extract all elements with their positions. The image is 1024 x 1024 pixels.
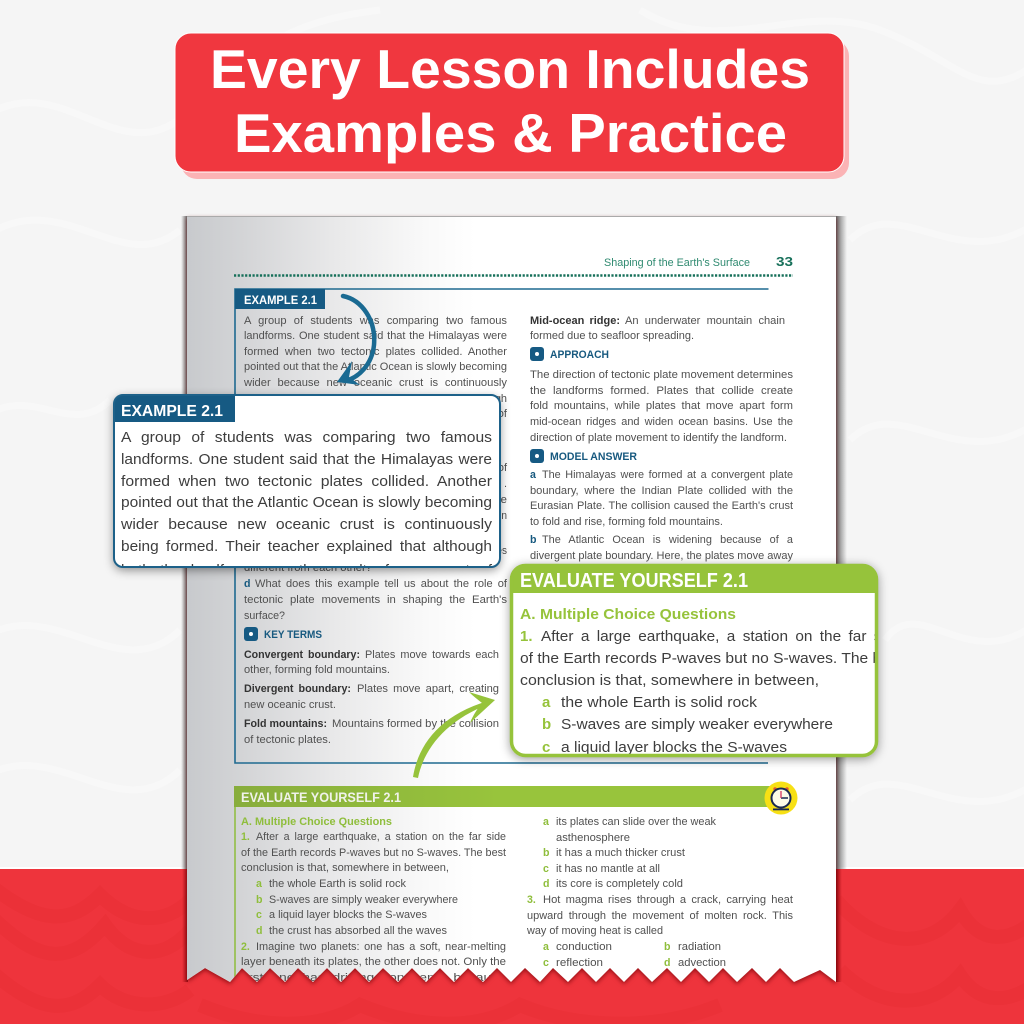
callout question text: of the Earth records P-waves but no S-waves. The best (520, 650, 903, 667)
callout body text: formed when two tectonic plates collided. Another (121, 473, 492, 490)
callout heading bar (510, 564, 878, 593)
practice questions right column: radiation (678, 941, 721, 953)
example text left column: b Why is the Atlantic Ocean growing wider at the (244, 494, 507, 506)
callout heading tab: EXAMPLE 2.1 (121, 403, 223, 420)
example text left column: What does this example tell us about the role of (255, 578, 507, 590)
example text right column: formed due to seafloor spreading. (530, 330, 694, 342)
practice questions right column: conduction (556, 941, 612, 953)
practice questions left column: layer beneath its plates, the other does not. Only the (241, 956, 506, 968)
example text left column: formed when two tectonic plates collided. Another (244, 346, 507, 358)
practice questions right column: d (543, 878, 549, 890)
practice questions right column: b (664, 941, 671, 953)
example text right column: Eurasian Plate. The collision caused the Earth's crust (530, 500, 793, 512)
practice questions left column: conclusion is that, somewhere in between, (241, 862, 449, 874)
example text right column: fold mountains, while plates that move apart form (530, 400, 793, 412)
callout question text: 1. (520, 628, 533, 645)
example text left column: surface? (244, 610, 285, 622)
example text right column: a (530, 469, 536, 481)
callout question text: A. Multiple Choice Questions (520, 606, 736, 623)
example text right column: Mid-ocean ridge: (530, 315, 620, 327)
example text left column: a What type of plate boundary formed the range of (244, 462, 507, 474)
example text left column: A group of students was comparing two famous (244, 315, 507, 327)
title banner: Every Lesson Includes (210, 38, 810, 100)
practice questions left column: S-waves are simply weaker everywhere (269, 894, 458, 906)
practice questions left column: the whole Earth is solid rock (269, 878, 407, 890)
running header: Shaping of the Earth's Surface (604, 257, 750, 269)
practice questions left column: 2. (241, 941, 250, 953)
running header: 33 (776, 254, 793, 269)
key terms: Divergent boundary: (244, 683, 351, 695)
icon: key terms bullet (244, 627, 258, 641)
callout: example 2.1 zoom (114, 395, 500, 579)
example text left column (243, 315, 508, 622)
callout question text: the whole Earth is solid rock (561, 694, 758, 711)
example text right column: The Atlantic Ocean is widening because of a (542, 534, 793, 546)
practice questions right column: it has a much thicker crust (556, 847, 685, 859)
example text right column: The Himalayas were formed at a convergent plate (542, 469, 793, 481)
key terms: Mountains formed by the collision (332, 718, 499, 730)
callout question text: conclusion is that, somewhere in between, (520, 672, 819, 689)
example text left column: pointed out that the Atlantic Ocean is slowly becoming (244, 361, 507, 373)
practice questions left column: the crust has absorbed all the waves (269, 925, 447, 937)
practice questions left column: A. Multiple Choice Questions (241, 816, 392, 828)
callout question text: After a large earthquake, a station on the far side (541, 628, 902, 645)
callout body text: both the landforms are the result of movement of (121, 562, 493, 579)
example text right column: The direction of tectonic plate movement determines (530, 369, 793, 381)
callout question text: S-waves are simply weaker everywhere (561, 716, 833, 733)
title banner (175, 33, 849, 179)
practice questions left column: b (256, 894, 263, 906)
textbook page (187, 216, 836, 990)
callout body text: landforms. One student said that the Himalayas were (121, 451, 492, 468)
practice questions right column: a (543, 941, 549, 953)
callout question text: a liquid layer blocks the S-waves (561, 739, 787, 756)
callout: evaluate yourself zoom (510, 564, 903, 757)
key terms: Plates move towards each (365, 649, 499, 661)
example text right column: APPROACH (550, 349, 609, 361)
key terms: new oceanic crust. (244, 699, 336, 711)
practice questions right column: reflection (556, 957, 603, 969)
icon: alarm clock (764, 782, 798, 814)
icon: approach bullet (530, 347, 544, 361)
example text left column: c How do the plates move at each type of boundary in (244, 510, 507, 522)
practice questions right column: c (543, 957, 549, 969)
example text left column: landforms. One student said that the Himalayas were (244, 330, 507, 342)
page edge shadows (181, 216, 847, 982)
callout body text: being formed. Their teacher explained that although (121, 538, 492, 555)
key terms: other, forming fold mountains. (244, 664, 390, 676)
callout body text (121, 431, 492, 566)
callout body text: wider because new oceanic crust is continuously (120, 516, 493, 533)
practice questions right column: way of moving heat is called (526, 925, 663, 937)
practice questions right column: advection (678, 957, 726, 969)
example text right column: direction of plate movement to identify the landform. (530, 432, 787, 444)
practice questions right column: upward through the movement of molten rock. This (527, 910, 793, 922)
example text left column: and how do the results of plate motion make these plates (244, 545, 507, 557)
key terms: Fold mountains: (244, 718, 327, 730)
icon: model answer bullet (530, 449, 544, 463)
practice questions left column: c (256, 909, 262, 921)
practice questions left column: Imagine two planets: one has a soft, near-melting (256, 941, 506, 953)
callout question text: c (542, 739, 550, 756)
arrow: blue from page example to callout (337, 296, 374, 385)
practice questions right column: it has no mantle at all (556, 863, 660, 875)
callout body text: pointed out that the Atlantic Ocean is slowly becoming (121, 494, 492, 511)
key terms (244, 627, 499, 746)
callout heading bar: EVALUATE YOURSELF 2.1 (520, 570, 748, 592)
practice questions right column: asthenosphere (556, 832, 630, 844)
callout heading tab (114, 395, 235, 422)
practice questions right column: a (543, 816, 549, 828)
example text right column: MODEL ANSWER (550, 451, 637, 463)
example text right column: mid-ocean ridges and widen ocean basins. Use the (530, 416, 793, 428)
practice questions right column: d (664, 957, 670, 969)
example text right column: to fold and rise, forming fold mountains. (530, 516, 723, 528)
callout question text: b (542, 716, 551, 733)
practice questions left column (241, 816, 506, 984)
practice questions left column: d (256, 925, 262, 937)
example text right column: boundary, where the Indian Plate collided with the (530, 485, 793, 497)
practice questions right column: b (543, 847, 550, 859)
practice questions right column: Hot magma rises through a crack, carrying heat (543, 894, 793, 906)
example text right column: divergent plate boundary. Here, the plates move away (530, 550, 794, 562)
example text left column: both the landforms are the result of movement of (244, 408, 507, 420)
practice questions left column: a liquid layer blocks the S-waves (269, 909, 427, 921)
key terms: KEY TERMS (264, 629, 322, 641)
evaluate yourself section bar: EVALUATE YOURSELF 2.1 (241, 789, 401, 805)
arrow: green from practice section to callout (413, 692, 495, 778)
example text left column: tectonic plate movements in shaping the Earth's (244, 594, 507, 606)
callout body text: A group of students was comparing two famous (121, 429, 492, 446)
callout question text: a (542, 694, 551, 711)
example text right column: the landforms formed. Plates that collide create (530, 385, 793, 397)
example text left column: wider because new oceanic crust is continuously (243, 377, 508, 389)
practice questions left column: of the Earth records P-waves but no S-waves. The best (241, 847, 506, 859)
practice questions right column: c (543, 863, 549, 875)
key terms: Convergent boundary: (244, 649, 360, 661)
example text right column: b (530, 534, 537, 546)
key terms: of tectonic plates. (244, 734, 331, 746)
practice questions right column: its plates can slide over the weak (556, 816, 717, 828)
example text left column: d (244, 578, 250, 590)
example box frame: EXAMPLE 2.1 (244, 293, 317, 307)
example text right column: An underwater mountain chain (625, 315, 785, 327)
practice questions left column: 1. (241, 831, 250, 843)
example text left column: different from each other? (244, 562, 372, 574)
callout question text (520, 606, 903, 756)
running header (234, 254, 793, 276)
example text left column: fold mountains in the Himalayas over many eras . (244, 478, 507, 490)
example box frame (235, 289, 768, 763)
practice questions left column: a (256, 878, 262, 890)
practice questions left column: first one has drifting continents because (241, 972, 506, 984)
practice questions right column: its core is completely cold (556, 878, 683, 890)
title banner: Examples & Practice (234, 102, 787, 164)
practice questions right column: 3. (527, 894, 536, 906)
example text left column: being formed. Their teacher explained that although (244, 393, 507, 405)
practice questions left column: After a large earthquake, a station on the far side (256, 831, 506, 843)
key terms: Plates move apart, creating (357, 683, 499, 695)
evaluate yourself section bar (234, 786, 770, 990)
example text right column (530, 315, 794, 562)
practice questions right column (526, 816, 793, 969)
